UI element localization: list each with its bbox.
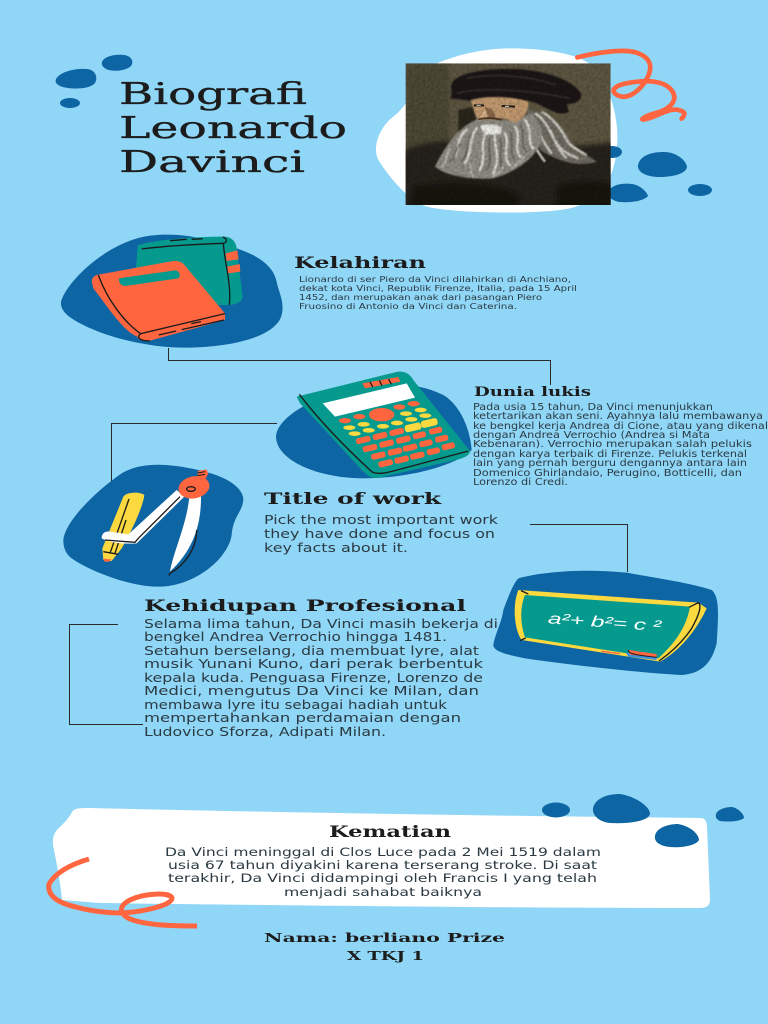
text: Title of work body	[264, 513, 498, 555]
icon: calculator	[276, 372, 472, 478]
text: Kehidupan Profesional body: Medici, mengutus Da Vinci ke Milan, dan	[144, 684, 479, 698]
white panel background	[53, 808, 710, 908]
white blob behind portrait	[376, 48, 617, 213]
text: Kelahiran body: Fruosino di Antonio da Vinci dan Caterina.	[299, 302, 517, 311]
orange squiggle: panel	[49, 859, 197, 926]
text: Kematian body: terakhir, Da Vinci didampingi oleh Francis I yang telah	[168, 871, 597, 885]
text: Kehidupan Profesional body: Ludovico Sforza, Adipati Milan.	[144, 725, 386, 739]
icon: compass and pencil	[63, 465, 243, 587]
text: Kelahiran body: 1452, dan merupakan anak dari pasangan Piero	[299, 293, 542, 302]
decorative dots: top right	[602, 146, 712, 202]
calculator screen	[323, 383, 415, 417]
text: Dunia lukis body: Lorenzo di Credi.	[473, 477, 568, 488]
text: Kehidupan Profesional body: kepala kuda. Penguasa Firenze, Lorenzo de	[144, 671, 483, 685]
text: Title of work body: Pick the most important work	[264, 513, 498, 527]
section: Kelahiran	[294, 253, 577, 311]
title	[119, 77, 347, 180]
heading: Dunia lukis: Dunia lukis	[474, 385, 591, 400]
decorative dots: top left	[56, 55, 132, 108]
decorative dots: panel	[542, 794, 744, 847]
calculator keys	[339, 401, 455, 468]
text: Kehidupan Profesional body: membawa lyre itu sebagai hadiah untuk	[144, 698, 447, 712]
icon: books	[61, 235, 283, 348]
heading: Kelahiran: Kelahiran	[294, 253, 426, 272]
blue blob behind books	[61, 235, 283, 348]
text: Kehidupan Profesional body	[144, 617, 498, 739]
text: Kematian body: usia 67 tahun diyakini karena terserang stroke. Di saat	[168, 858, 598, 872]
heading: Kematian: Kematian	[329, 822, 451, 841]
chalkboard formula: a²+ b²= c ²	[547, 610, 663, 635]
text: Dunia lukis body: dengan karya terbaik di Firenze. Pelukis terkenal	[473, 449, 747, 460]
panel: Kematian	[49, 794, 744, 926]
text: Kematian body: Da Vinci meninggal di Clos Luce pada 2 Mei 1519 dalam	[165, 845, 601, 859]
blue blob behind compass	[63, 465, 243, 587]
heading: Title of work: Title of work	[264, 489, 442, 508]
text: Kelahiran body	[299, 275, 577, 311]
footer: author: X TKJ 1	[347, 948, 424, 963]
portrait: hair	[527, 110, 597, 164]
portrait: coat	[402, 142, 615, 210]
compass head	[176, 469, 212, 501]
portrait of Leonardo da Vinci	[402, 63, 615, 210]
text: Kehidupan Profesional body: Selama lima tahun, Da Vinci masih bekerja di	[144, 617, 498, 631]
portrait: moustache	[480, 124, 502, 135]
portrait: neck shadow	[458, 106, 476, 132]
text: Kematian body	[165, 845, 601, 899]
text: Kehidupan Profesional body: musik Yunani Kuno, dari perak berbentuk	[144, 657, 483, 671]
teal book	[136, 237, 243, 305]
title: Biografi	[119, 77, 307, 112]
text: Title of work body: they have done and focus on	[264, 527, 495, 541]
text: Kematian body: menjadi sahabat baiknya	[284, 885, 482, 899]
portrait: face	[470, 95, 528, 123]
title: Leonardo	[119, 111, 347, 146]
footer: author	[264, 930, 505, 963]
portrait: hat	[450, 69, 581, 114]
text: Dunia lukis body: Kebenaran). Verrochio merupakan salah pelukis	[473, 439, 752, 450]
calculator top strip	[362, 377, 400, 388]
text: Kelahiran body: dekat kota Vinci, Republik Firenze, Italia, pada 15 April	[299, 284, 577, 293]
section: Title of work	[264, 489, 498, 555]
text: Kelahiran body: Lionardo di ser Piero da Vinci dilahirkan di Anchiano,	[299, 275, 571, 284]
compass arm	[102, 490, 184, 544]
text: Title of work body: key facts about it.	[264, 541, 408, 555]
chalk tray	[602, 650, 657, 660]
connector lines	[70, 348, 628, 724]
blue blob behind chalkboard	[493, 571, 718, 675]
text: Dunia lukis body	[473, 402, 768, 488]
icon: chalkboard	[493, 571, 718, 675]
text: Kehidupan Profesional body: mempertahankan perdamaian dengan	[144, 711, 461, 725]
compass leg	[169, 493, 201, 576]
calculator body	[297, 372, 470, 478]
section: Kehidupan Profesional	[144, 596, 498, 739]
heading: Kehidupan Profesional: Kehidupan Profesional	[144, 596, 466, 615]
section: Dunia lukis	[473, 385, 768, 488]
blue blob behind calculator	[276, 384, 472, 478]
text: Dunia lukis body: dengan Andrea Verrochio (Andrea si Mata	[473, 430, 710, 441]
text: Dunia lukis body: Domenico Ghirlandaio, Perugino, Botticelli, dan	[473, 468, 742, 479]
footer: author: Nama: berliano Prize	[264, 930, 505, 945]
text: Kehidupan Profesional body: bengkel Andrea Verrochio hingga 1481.	[144, 630, 447, 644]
text: Dunia lukis body: ketertarikan akan seni. Ayahnya lalu membawanya	[473, 411, 763, 422]
portrait: beard	[435, 113, 542, 179]
chalkboard frame	[515, 590, 707, 662]
text: Dunia lukis body: ke bengkel kerja Andrea di Cione, atau yang dikenal	[473, 421, 768, 432]
orange squiggle: top right	[577, 51, 684, 120]
chalkboard surface	[521, 595, 690, 658]
text: Kehidupan Profesional body: Setahun berselang, dia membuat lyre, alat	[144, 644, 479, 658]
title: Davinci	[119, 145, 305, 180]
pencil	[102, 493, 144, 562]
text: Dunia lukis body: lain yang pernah berguru dengannya antara lain	[473, 458, 747, 469]
text: Dunia lukis body: Pada usia 15 tahun, Da Vinci menunjukkan	[473, 402, 713, 413]
orange book	[92, 261, 225, 341]
